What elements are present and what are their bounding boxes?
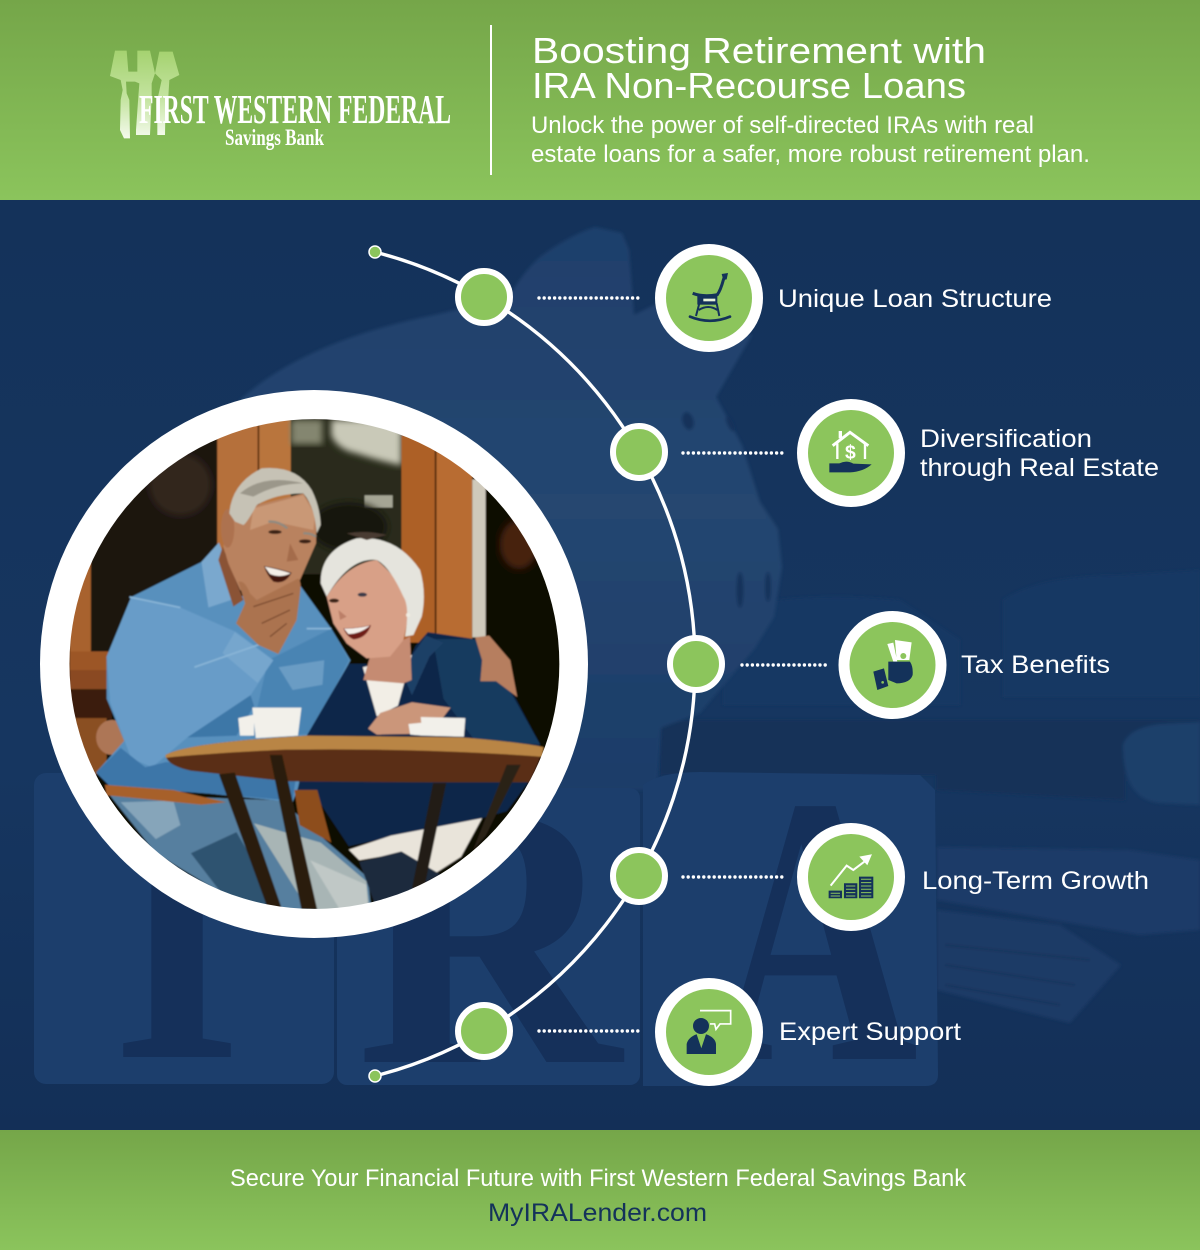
icon: rocking chair (660, 250, 758, 346)
item: Expert Support (458, 984, 961, 1080)
wood left frame (70, 562, 112, 774)
man shirt (96, 543, 351, 802)
icon: growth chart and coins (802, 828, 900, 926)
woman legs (359, 851, 440, 909)
node (613, 426, 665, 478)
item: Diversification through Real Estate (613, 404, 1159, 502)
node (670, 638, 722, 690)
dotted connector (539, 1029, 638, 1033)
man arm behind (96, 720, 128, 755)
subtitle: Unlock the power of self-directed IRAs with real (531, 112, 1034, 139)
clasped hands (368, 702, 451, 735)
cup right (408, 717, 465, 737)
chair back (294, 790, 331, 843)
label: Tax Benefits (961, 651, 1110, 679)
item: Long-Term Growth (613, 828, 1149, 926)
man jeans (108, 794, 372, 913)
cup left (238, 708, 301, 738)
man hand (236, 578, 301, 654)
node (458, 1005, 510, 1057)
logo: fork emblem (110, 51, 179, 138)
label: Expert Support (779, 1018, 961, 1046)
icon: hand holding money (844, 616, 941, 714)
man head (218, 468, 321, 654)
dotted connector (742, 663, 826, 667)
background: A block (643, 718, 938, 1142)
main background panel (0, 200, 1200, 1145)
title: IRA Non-Recourse Loans (532, 65, 966, 106)
node (613, 850, 665, 902)
arc end dot (369, 1070, 381, 1082)
woman jacket (298, 632, 540, 846)
icon: house in hand (802, 404, 900, 502)
item: Unique Loan Structure (458, 250, 1052, 346)
photo of laughing senior couple (40, 390, 588, 938)
title: Boosting Retirement with (532, 30, 986, 71)
wood column (217, 420, 291, 553)
arc start dot (369, 246, 381, 258)
icon: house in hand: $ (845, 442, 856, 463)
window left (91, 436, 219, 653)
logo: bank name: FIRST WESTERN FEDERAL (139, 86, 451, 132)
footer headline: Secure Your Financial Future with First Western Federal Savings Bank (230, 1165, 967, 1192)
subtitle (531, 112, 1090, 168)
icon: advisor with speech bubble (660, 984, 758, 1080)
node (458, 271, 510, 323)
item: Tax Benefits (670, 616, 1110, 714)
header band (0, 0, 1200, 200)
belt (105, 785, 226, 805)
footer URL: MyIRALender.com (488, 1199, 707, 1227)
label: Unique Loan Structure (778, 285, 1052, 313)
background: R block: R (356, 724, 625, 1145)
subtitle: estate loans for a safer, more robust retirement plan. (531, 141, 1090, 168)
dotted connector (683, 451, 782, 455)
label second line: through Real Estate (920, 454, 1159, 482)
background: I block: I (112, 719, 242, 1140)
title (532, 30, 986, 106)
logo (110, 51, 451, 150)
right wood frame (401, 436, 472, 643)
label: Diversification (920, 425, 1092, 453)
woman head (321, 532, 424, 683)
label: Long-Term Growth (922, 867, 1149, 895)
dotted connector (683, 875, 782, 879)
background: A block: A (712, 718, 918, 1142)
dotted connector (539, 296, 638, 300)
woman white shirt (349, 655, 482, 872)
background: books and papers (660, 570, 1200, 1023)
man hand on shoulder (475, 636, 517, 697)
footer band (0, 1130, 1200, 1250)
timeline arc (369, 246, 695, 1082)
center window (291, 420, 401, 574)
background: I block (34, 719, 334, 1140)
background: piggy bank (240, 227, 782, 790)
logo: tagline: Savings Bank (225, 125, 324, 150)
table (166, 736, 544, 909)
